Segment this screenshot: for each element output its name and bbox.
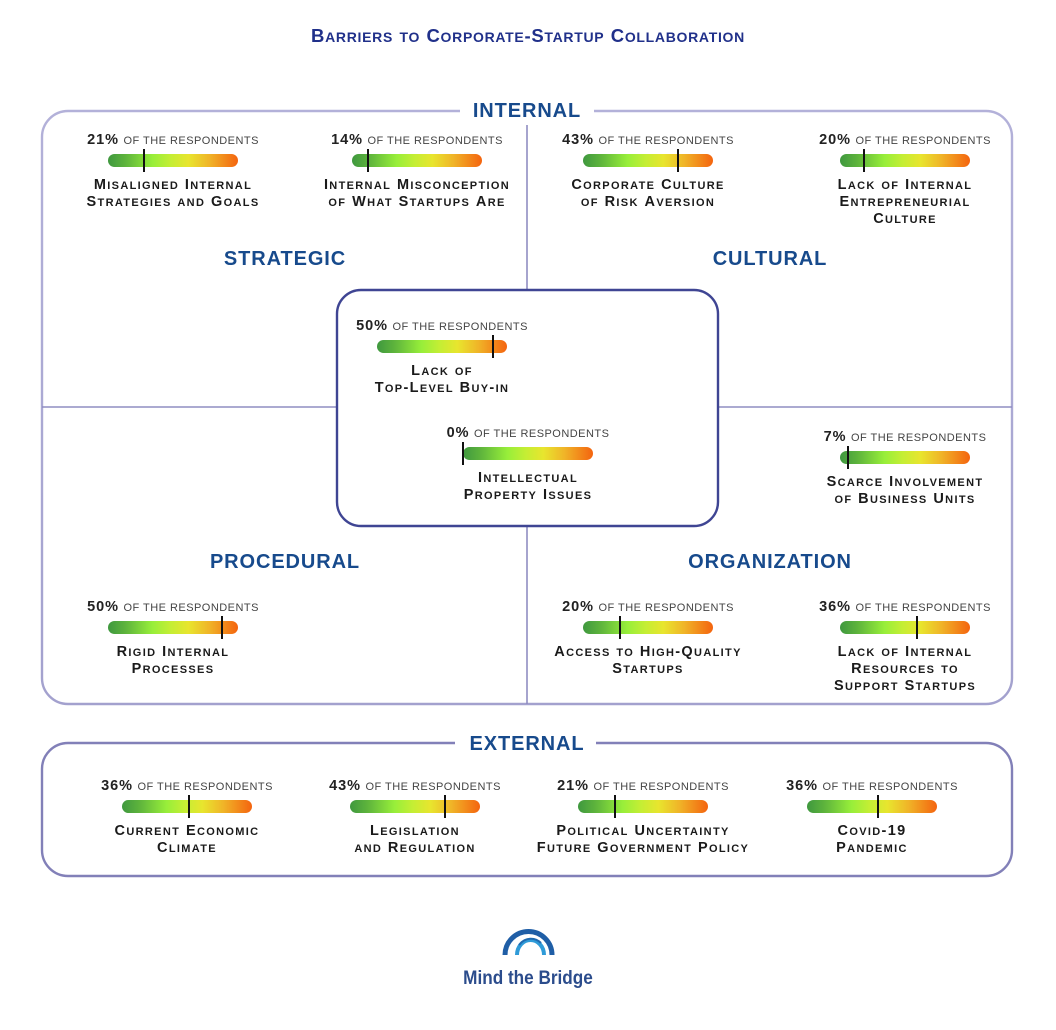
label: Culture [873, 210, 937, 226]
label: Startups [612, 660, 684, 676]
gauge [583, 154, 713, 167]
percent: 21% OF THE RESPONDENTS [557, 778, 729, 794]
label: Corporate Culture [571, 176, 725, 192]
label [464, 468, 592, 502]
label: Scarce Involvement [827, 472, 983, 490]
label: Intellectual [478, 468, 578, 486]
logo wordmark: Mind the Bridge [463, 967, 593, 989]
heading: procedural: PROCEDURAL [210, 551, 360, 573]
heading: external: EXTERNAL [470, 733, 584, 755]
label: of What Startups Are [328, 192, 506, 210]
label: Lack of Internal [838, 642, 972, 660]
gauge [463, 447, 593, 460]
label [554, 642, 742, 676]
percent: 43% OF THE RESPONDENTS [562, 132, 734, 148]
label [115, 822, 259, 856]
label: Strategies and Goals [86, 192, 260, 210]
gauge [108, 621, 238, 634]
percent: 21% OF THE RESPONDENTS [87, 132, 259, 148]
gauge [578, 800, 708, 813]
percent: 36% OF THE RESPONDENTS [819, 599, 991, 615]
percent: 20% OF THE RESPONDENTS [819, 132, 991, 148]
gauge item: legislation [329, 778, 501, 856]
label: Lack of [411, 362, 473, 378]
label: Support Startups [834, 676, 976, 694]
gauge item: misconception [324, 132, 510, 210]
label [537, 822, 749, 856]
label [571, 176, 725, 210]
heading: organization: ORGANIZATION [688, 551, 852, 573]
label: Top-Level Buy-in [375, 378, 509, 396]
label: Climate [157, 838, 217, 856]
label: Legislation [370, 822, 460, 838]
label: Covid-19 [838, 822, 906, 838]
label [324, 176, 510, 210]
percent: 0% OF THE RESPONDENTS [447, 425, 609, 441]
gauge [377, 340, 507, 353]
label [374, 362, 509, 396]
gauge item: risk aversion [562, 132, 734, 210]
gauge [840, 451, 970, 464]
icon: bridge logo [495, 924, 561, 958]
percent: 43% OF THE RESPONDENTS [329, 778, 501, 794]
label: Misaligned Internal [94, 176, 252, 192]
gauge item: misaligned strategies [86, 132, 260, 210]
label: and Regulation [354, 838, 476, 856]
label [117, 642, 229, 676]
label [838, 176, 972, 226]
label: Pandemic [836, 838, 908, 856]
label [827, 472, 983, 506]
label: of Risk Aversion [581, 192, 715, 210]
gauge item: intellectual property [447, 425, 609, 502]
gauge [840, 621, 970, 634]
gauge item: internal resources [819, 599, 991, 694]
label: Rigid Internal [117, 642, 229, 660]
percent: 20% OF THE RESPONDENTS [562, 599, 734, 615]
heading: strategic: STRATEGIC [224, 248, 346, 270]
gauge [352, 154, 482, 167]
label: Internal Misconception [324, 176, 510, 192]
gauge item: high-quality startups [554, 599, 742, 676]
heading: cultural: CULTURAL [713, 248, 827, 270]
label: Resources to [851, 660, 959, 676]
gauge item: economic climate [101, 778, 273, 856]
gauge [840, 154, 970, 167]
label [752, 822, 992, 856]
gauge [350, 800, 480, 813]
percent: 7% OF THE RESPONDENTS [824, 429, 986, 445]
gauge [108, 154, 238, 167]
label [834, 642, 976, 694]
heading: internal: INTERNAL [473, 100, 581, 122]
label: of Business Units [834, 490, 976, 506]
percent: 50% OF THE RESPONDENTS [87, 599, 259, 615]
gauge item: business units [824, 429, 986, 506]
label: Lack of Internal [838, 176, 972, 192]
label: Entrepreneurial [839, 192, 971, 210]
label [86, 176, 260, 210]
label: Property Issues [464, 486, 592, 502]
percent: 14% OF THE RESPONDENTS [331, 132, 503, 148]
gauge [583, 621, 713, 634]
percent: 36% OF THE RESPONDENTS [786, 778, 958, 794]
gauge [807, 800, 937, 813]
label [354, 822, 476, 856]
gauge item: top-level buy-in [356, 318, 528, 396]
title: Barriers to Corporate-Startup Collaboration [311, 24, 745, 47]
label: Access to High-Quality [554, 642, 742, 660]
gauge item: entrepreneurial culture [819, 132, 991, 226]
label: Political Uncertainty [556, 822, 730, 838]
gauge item: political uncertainty [537, 778, 749, 856]
gauge [122, 800, 252, 813]
label: Processes [132, 660, 214, 676]
label: Future Government Policy [537, 838, 749, 856]
percent: 50% OF THE RESPONDENTS [356, 318, 528, 334]
percent: 36% OF THE RESPONDENTS [101, 778, 273, 794]
gauge item: covid-19 [752, 778, 992, 858]
gauge item: rigid processes [87, 599, 259, 676]
label: Current Economic [115, 822, 259, 838]
